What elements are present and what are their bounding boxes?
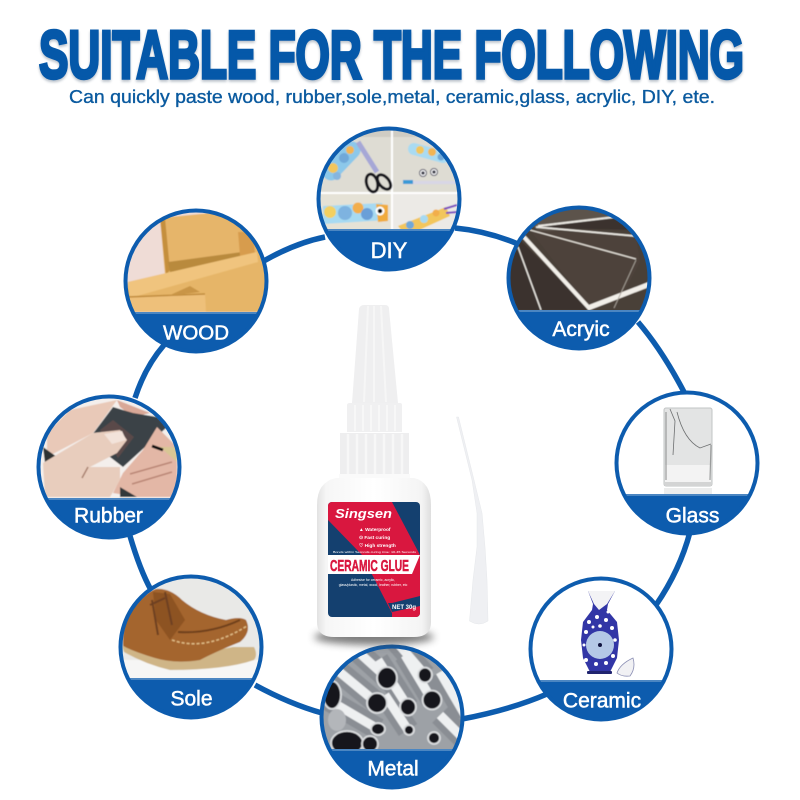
panel: Metal: Metal bbox=[367, 758, 419, 780]
description: Adhesive for ceramic, acrylic, bbox=[351, 578, 395, 582]
marker bbox=[403, 180, 459, 184]
glue bottle bbox=[314, 305, 434, 645]
feature list: ⊙ Fast curing bbox=[359, 535, 390, 541]
label band: Glass bbox=[626, 494, 748, 532]
label band: Metal bbox=[332, 749, 452, 786]
finished fish bbox=[398, 204, 458, 229]
description bbox=[339, 578, 408, 587]
panel: Sole: Sole bbox=[170, 688, 213, 710]
feature list: ▲ Waterproof bbox=[359, 527, 391, 533]
fine print: Bonds within Seconds curing time: 10-45 Seconds bbox=[333, 550, 417, 554]
fish roll bbox=[323, 202, 388, 224]
panel: Glass: Glass bbox=[666, 504, 719, 528]
nozzle bbox=[339, 305, 410, 478]
feature list: ♡ High strength bbox=[359, 543, 396, 549]
subtitle: Can quickly paste wood, rubber,sole,metal, ceramic,glass, acrylic, DIY, ete. bbox=[69, 87, 715, 107]
panel: DIY: DIY bbox=[371, 238, 408, 263]
label band: Ceramic bbox=[540, 680, 662, 718]
lower right hand bbox=[113, 427, 177, 497]
rubber strip bbox=[92, 407, 167, 467]
label band: WOOD bbox=[135, 312, 257, 350]
label band: Acryic bbox=[518, 310, 640, 346]
panel: Rubber bbox=[37, 395, 182, 543]
bottle shadow bbox=[314, 629, 434, 645]
panel: Sole bbox=[118, 575, 263, 723]
connecting ring bbox=[130, 228, 690, 719]
googly eyes bbox=[420, 168, 438, 176]
panel: Acrylic bbox=[507, 206, 652, 355]
broken shard bbox=[617, 658, 634, 676]
net weight: NET 30g bbox=[392, 605, 416, 611]
label band: Sole bbox=[130, 678, 252, 716]
product name: CERAMIC GLUE bbox=[330, 558, 409, 575]
panel: Ceramic bbox=[529, 578, 674, 725]
panel: Rubber: Rubber bbox=[74, 504, 143, 528]
product label bbox=[328, 502, 420, 617]
metal tubes bbox=[324, 648, 460, 745]
upper hand bbox=[47, 400, 117, 457]
panel: Acrylic: Acryic bbox=[552, 318, 610, 341]
shoe upper bbox=[123, 589, 248, 662]
brand name: Singsen bbox=[335, 506, 392, 521]
roll with dots bbox=[328, 146, 354, 180]
panel: Wood bbox=[123, 208, 270, 357]
shoe sole bbox=[122, 646, 256, 670]
feature list bbox=[359, 527, 396, 549]
thumb bbox=[43, 430, 127, 497]
label band: DIY bbox=[328, 229, 450, 268]
bottle body bbox=[317, 478, 431, 637]
description: glass/plastic, metal, wood, leather, rubber, etc bbox=[339, 583, 408, 587]
plastic applicator tip bbox=[456, 417, 488, 624]
panel: Ceramic: Ceramic bbox=[563, 690, 641, 712]
panel: DIY bbox=[317, 127, 463, 274]
panel: Glass bbox=[615, 392, 760, 539]
roll top right bbox=[414, 146, 444, 160]
icon: cracked glass bbox=[664, 408, 712, 494]
icon: scissors bbox=[358, 142, 393, 193]
panel: Wood: WOOD bbox=[163, 322, 229, 344]
label band: Rubber bbox=[48, 498, 170, 536]
icon: blue and white vase bbox=[581, 591, 634, 676]
panel: Metal bbox=[320, 640, 470, 794]
